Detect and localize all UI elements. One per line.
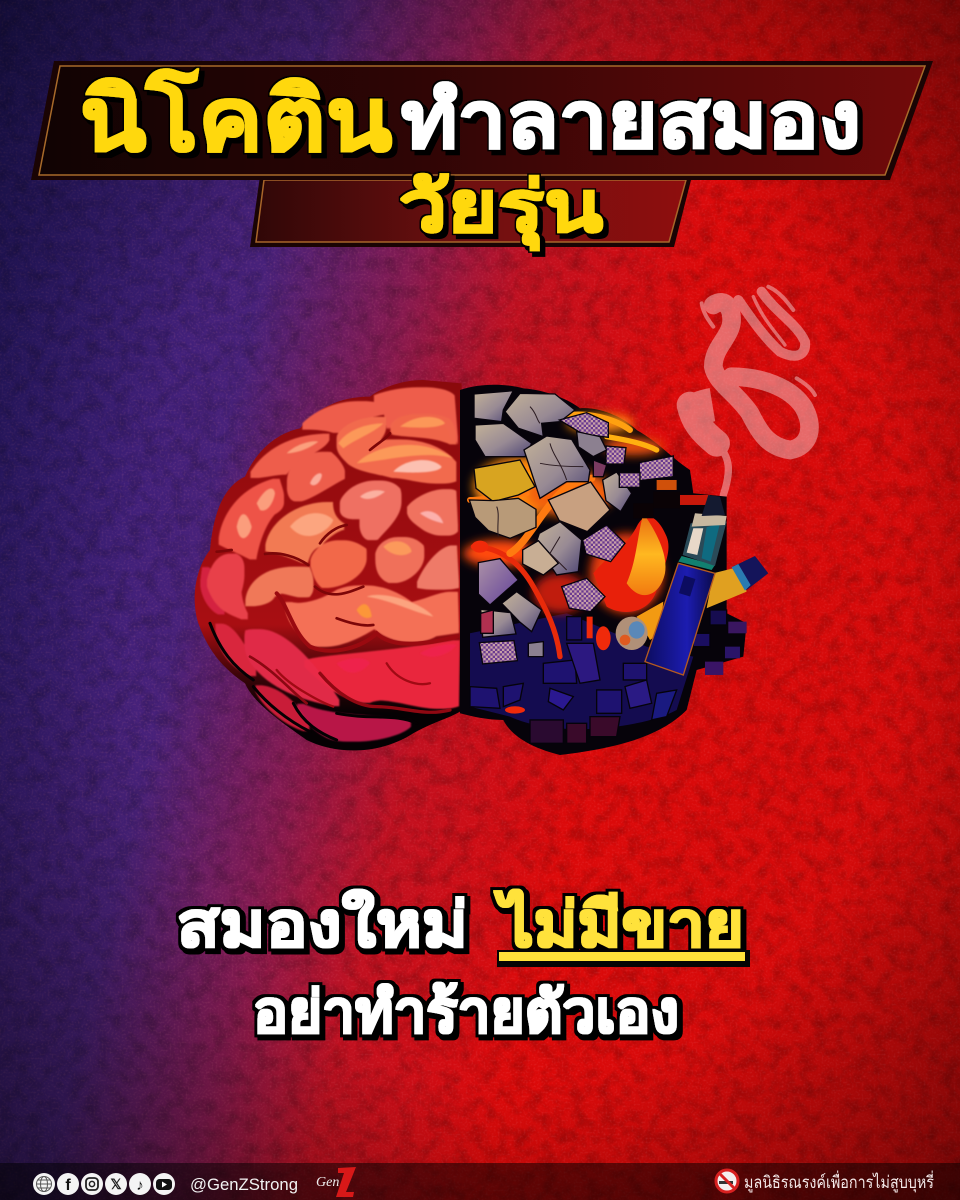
flames (593, 480, 710, 612)
slogan: not for sale: ไม่มีขาย (494, 889, 744, 960)
footer band (0, 1163, 960, 1200)
handle: @GenZStrong (190, 1175, 298, 1194)
vape device (645, 495, 727, 675)
brain highlights (237, 417, 457, 673)
Gen Z logo (316, 1167, 356, 1197)
lower navy fill (470, 613, 693, 729)
social icons: ♪ (136, 1177, 144, 1194)
cigarette (616, 602, 663, 650)
blue rubble blocks (470, 610, 747, 743)
stone cracks (497, 407, 583, 570)
lava cracks (470, 414, 657, 657)
brain illustration (195, 380, 768, 755)
title word: teens: วัยรุ่น (399, 168, 603, 251)
social icons: 𝕏 (110, 1176, 122, 1192)
brain: healthy left hemisphere (195, 380, 467, 750)
brain: burned right hemisphere (460, 385, 747, 755)
title word: nicotine: นิโคติน (80, 69, 392, 169)
cracked stone pieces (469, 391, 673, 664)
foundation logo and name (716, 1170, 934, 1193)
slogan line 2: อย่าทำร้ายตัวเอง (253, 980, 679, 1045)
social icons: f (65, 1177, 71, 1194)
brain sulci (217, 433, 457, 712)
lower hot spots (472, 541, 611, 714)
brain lower black creases (210, 623, 417, 740)
brain lobes (203, 390, 457, 739)
Gen Z logo: Gen (316, 1175, 339, 1190)
underline (497, 950, 750, 967)
slogan: new brains: สมองใหม่ (177, 889, 468, 960)
smoke from vape (683, 287, 815, 495)
upper banner plate (31, 61, 933, 180)
slogan line 1 (177, 889, 750, 967)
lava glow (463, 414, 663, 613)
social icons (33, 1173, 175, 1195)
cartridge tube behind vape (707, 556, 768, 608)
no smoking icon (716, 1170, 738, 1192)
title banner (31, 61, 933, 251)
lower banner plate (250, 176, 692, 247)
title word: destroys brain: ทำลายสมอง (401, 76, 861, 164)
